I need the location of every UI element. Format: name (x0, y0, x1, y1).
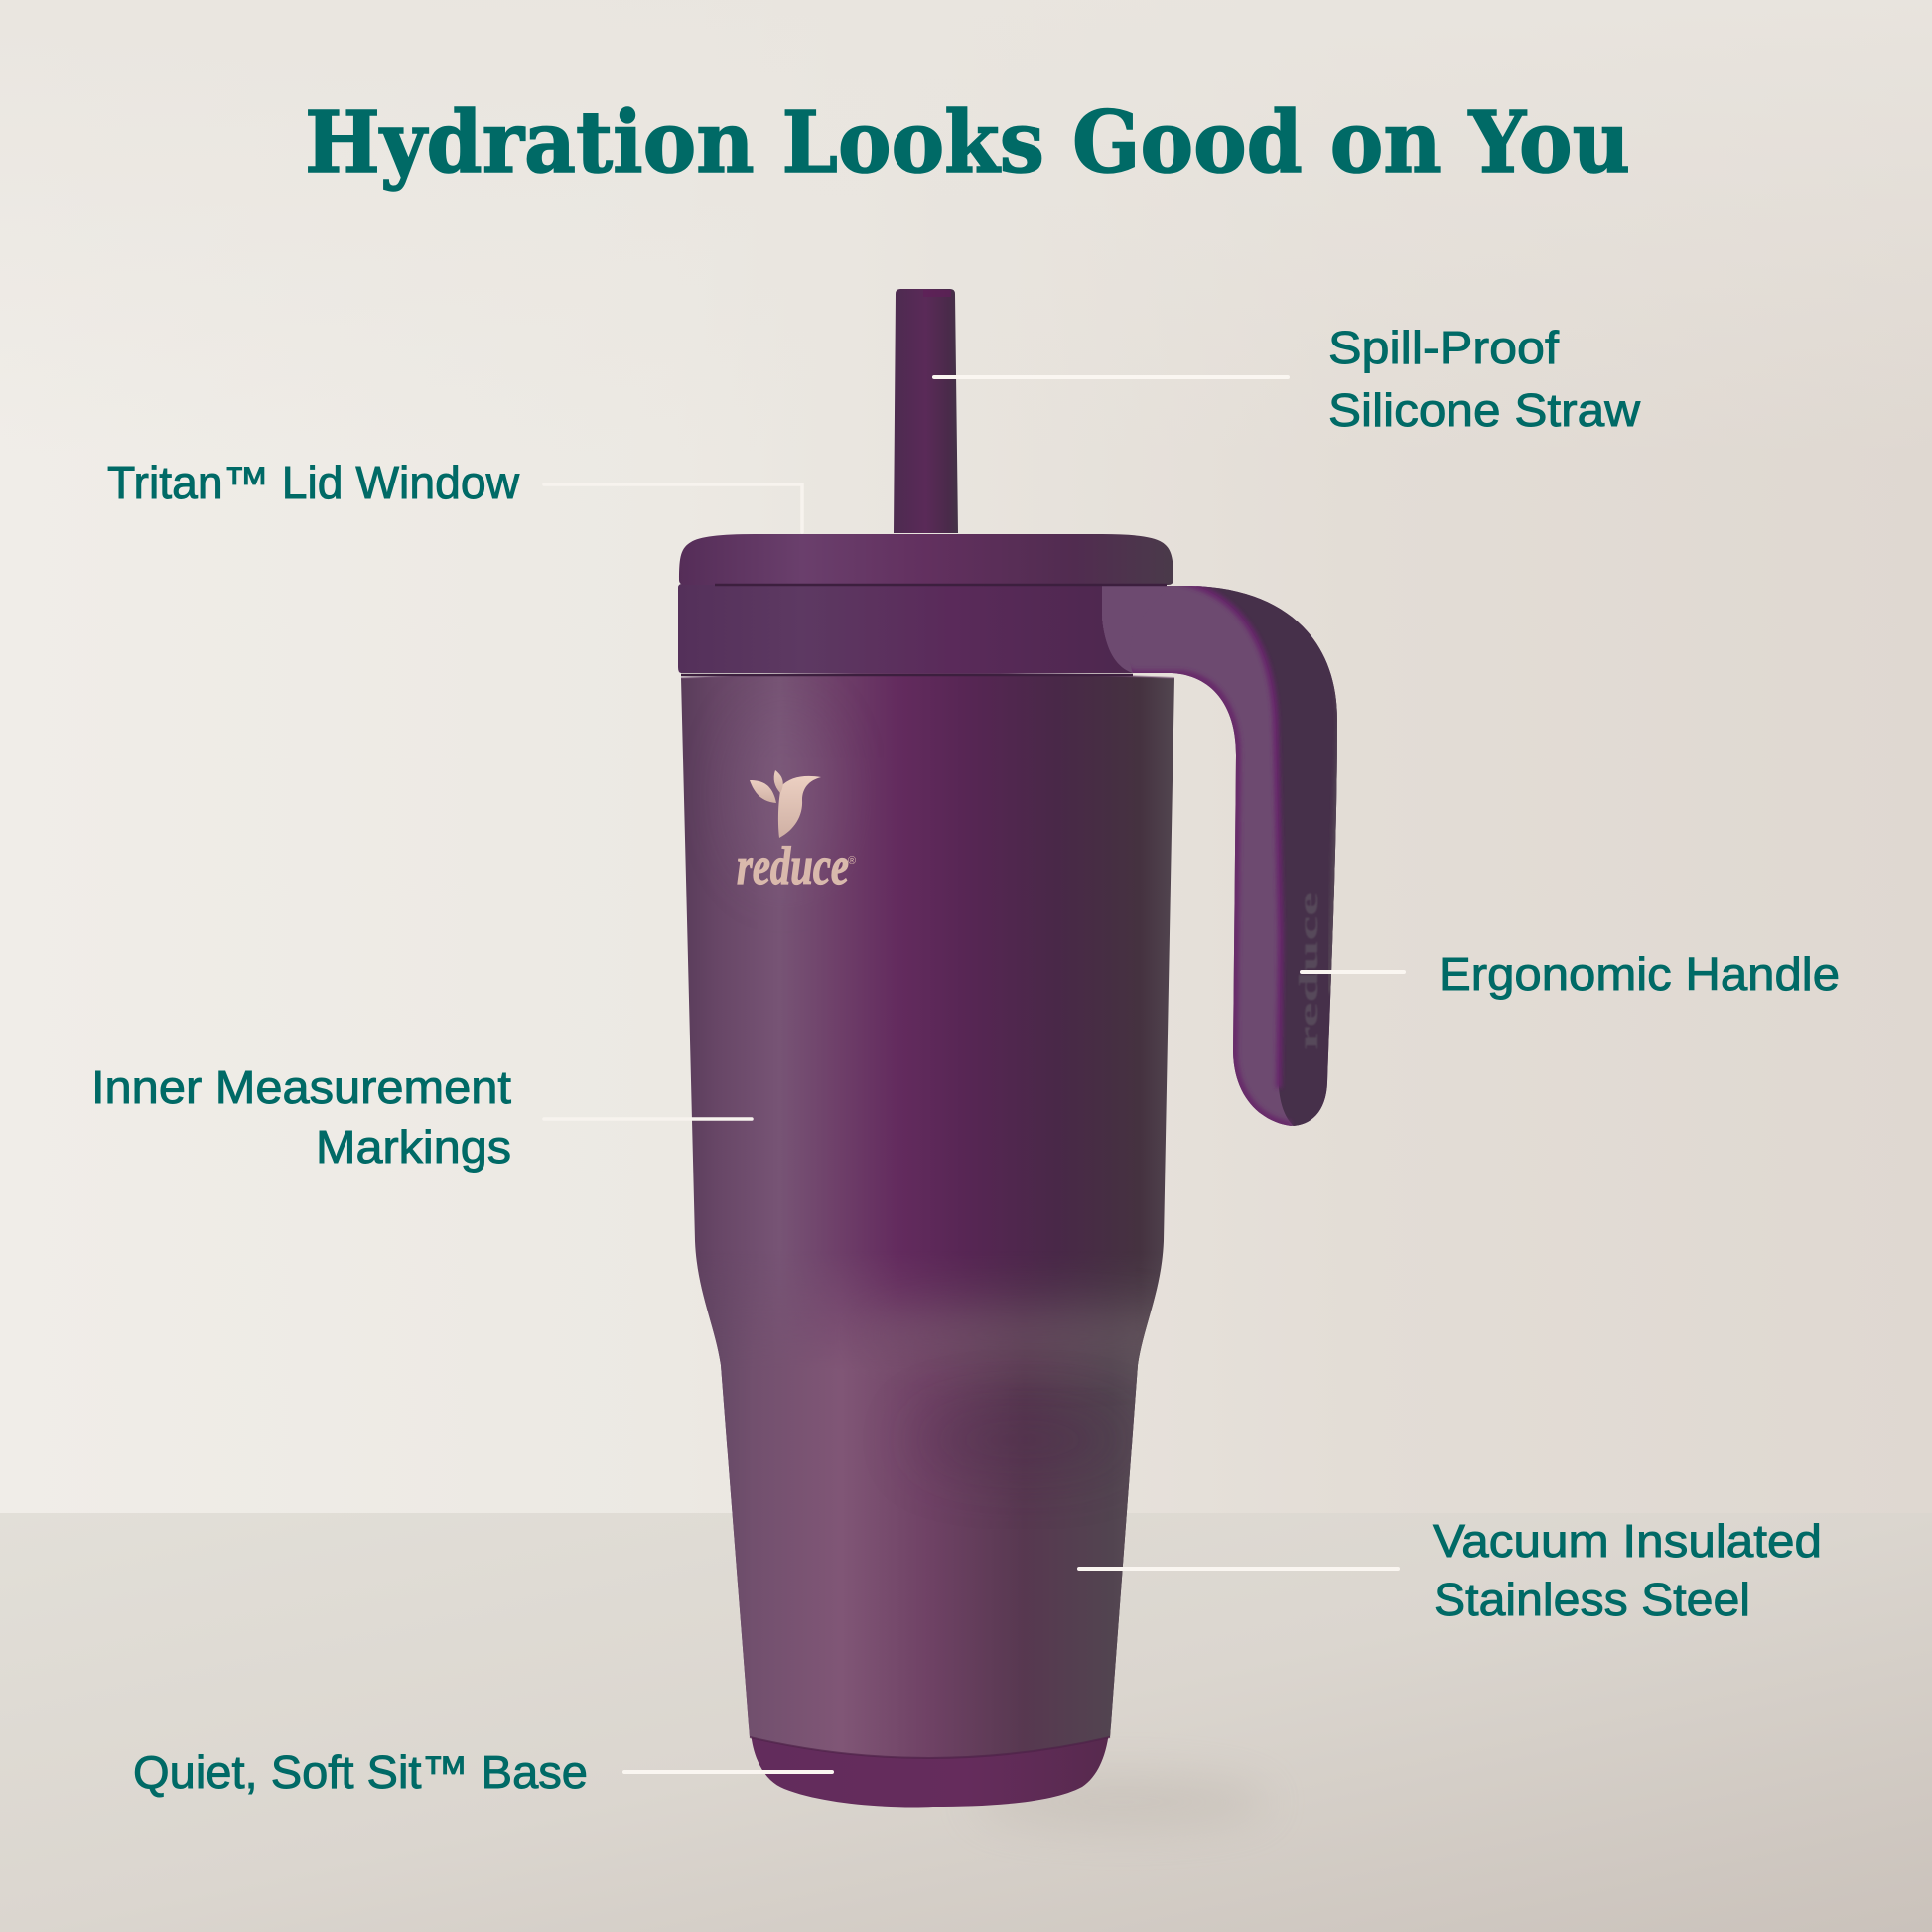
floor shadow (973, 1776, 1271, 1828)
callout: insulation: Stainless Steel (1434, 1574, 1750, 1625)
reduce logo (737, 770, 856, 896)
straw (894, 289, 958, 533)
callout: straw: Spill-Proof (1328, 322, 1559, 373)
callout: measurement markings: Inner Measurement (91, 1061, 511, 1113)
tumbler product (675, 289, 1350, 1807)
callout: insulation: Vacuum Insulated (1433, 1515, 1822, 1567)
callout: straw: Silicone Straw (1328, 384, 1641, 436)
floor surface (0, 1513, 1932, 1932)
background wall (0, 0, 1932, 1513)
title: Hydration Looks Good on You (305, 93, 1630, 193)
tumbler body (681, 673, 1174, 1759)
handle (1102, 582, 1350, 1132)
logo wordmark: reduce (737, 836, 849, 896)
callout: insulation (1079, 1515, 1822, 1625)
callout: lid window: Tritan™ Lid Window (107, 457, 520, 508)
callout: straw (934, 322, 1641, 436)
callout: base: Quiet, Soft Sit™ Base (133, 1746, 588, 1798)
handle imprint: reduce (1294, 892, 1323, 1050)
callout: measurement markings: Markings (316, 1121, 511, 1173)
collar ring (678, 584, 1172, 675)
logo sprout (750, 770, 821, 838)
callout: handle: Ergonomic Handle (1439, 948, 1840, 1000)
lid (679, 534, 1173, 585)
base (751, 1732, 1109, 1807)
logo registered mark: ® (848, 855, 856, 867)
callout: lid window (107, 457, 802, 532)
callout: measurement markings (91, 1061, 752, 1173)
